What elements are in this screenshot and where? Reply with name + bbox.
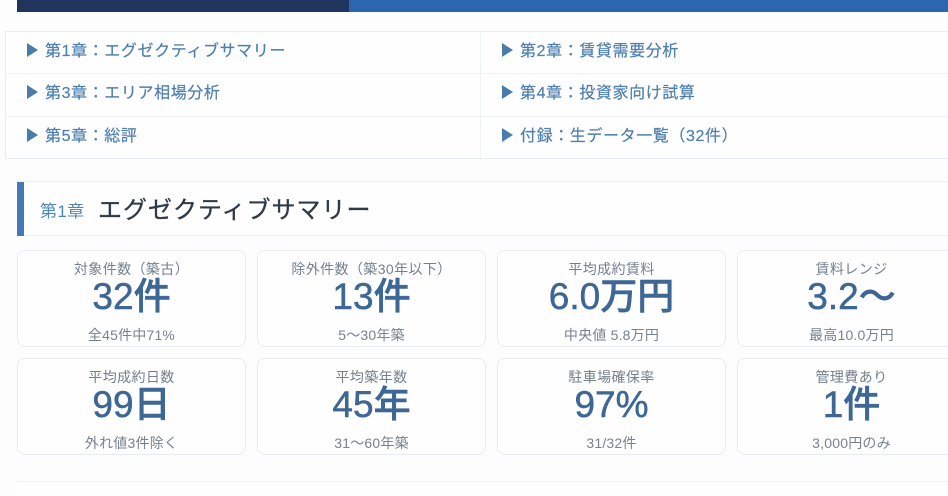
KPI card: target count: 全45件中71%	[88, 327, 175, 343]
KPI card: average days to contract	[17, 358, 246, 455]
KPI card: target count: 32件	[92, 276, 171, 317]
KPI card: target count: 対象件数（築古）	[74, 261, 189, 277]
top header bar	[17, 0, 948, 12]
toc item: chapter 2: 第2章：賃貸需要分析	[520, 43, 679, 60]
heading: chapter 1 executive summary	[17, 181, 948, 236]
KPI card: target count	[17, 250, 246, 347]
KPI card: average building age: 31〜60年築	[334, 435, 409, 451]
heading title: エグゼクティブサマリー	[98, 197, 372, 224]
toc item: chapter 1: 第1章：エグゼクティブサマリー	[45, 43, 286, 60]
KPI card: excluded count: 5〜30年築	[338, 327, 405, 343]
toc item: chapter 4: 第4章：投資家向け試算	[520, 85, 696, 102]
KPI card: rent range: 3.2〜	[807, 276, 896, 317]
KPI card: average rent: 中央値 5.8万円	[564, 327, 659, 343]
header bar dark segment	[17, 0, 349, 12]
KPI card: parking rate: 駐車場確保率	[568, 369, 655, 385]
toc item: chapter 3: 第3章：エリア相場分析	[45, 85, 220, 102]
KPI card: management fee	[737, 358, 948, 455]
KPI card: rent range: 最高10.0万円	[809, 327, 894, 343]
KPI card: average rent	[497, 250, 726, 347]
KPI card: management fee: 1件	[823, 384, 880, 425]
KPI card: average days to contract: 外れ値3件除く	[85, 435, 178, 451]
KPI card: rent range	[737, 250, 948, 347]
toc item: appendix: 付録：生データ一覧（32件）	[520, 128, 738, 145]
KPI card: average rent: 平均成約賃料	[568, 261, 655, 277]
next section top edge	[17, 481, 948, 496]
KPI card: excluded count: 除外件数（築30年以下）	[291, 261, 452, 277]
KPI card: management fee: 管理費あり	[816, 369, 888, 385]
toc item: chapter 5: 第5章：総評	[45, 128, 138, 145]
KPI card: management fee: 3,000円のみ	[812, 435, 891, 451]
KPI card: excluded count: 13件	[332, 276, 411, 317]
KPI card: rent range: 賃料レンジ	[816, 261, 888, 277]
heading accent bar	[17, 182, 24, 236]
heading chapter label: 第1章	[40, 202, 85, 221]
KPI card: average days to contract: 99日	[92, 384, 171, 425]
KPI card: average days to contract: 平均成約日数	[88, 369, 175, 385]
panel: table of contents	[5, 31, 948, 159]
KPI card: average building age: 平均築年数	[336, 369, 408, 385]
KPI card: excluded count	[257, 250, 486, 347]
KPI card: average building age	[257, 358, 486, 455]
KPI card: parking rate	[497, 358, 726, 455]
KPI card: parking rate: 97%	[574, 384, 649, 425]
KPI card: average building age: 45年	[332, 384, 411, 425]
KPI card: average rent: 6.0万円	[549, 276, 674, 317]
KPI card: parking rate: 31/32件	[586, 435, 637, 451]
